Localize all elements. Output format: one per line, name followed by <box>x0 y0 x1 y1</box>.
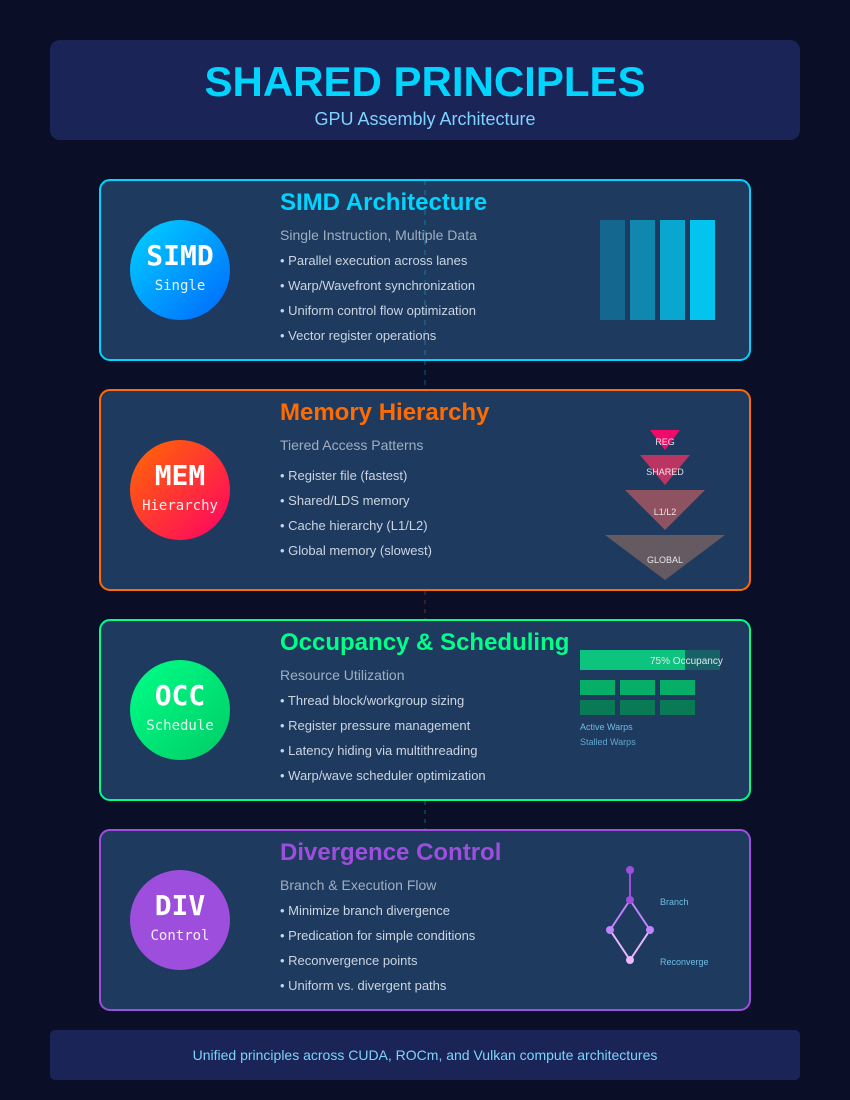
badge: DIV <box>130 870 230 970</box>
chart: occupancy: Active Warps <box>580 722 633 732</box>
memory text block: • Shared/LDS memory <box>280 493 410 508</box>
SIMD text block <box>280 227 477 343</box>
divergence text block <box>280 877 476 993</box>
badge: MEM: MEM <box>155 459 205 492</box>
memory text block: • Global memory (slowest) <box>280 543 432 558</box>
badge: SIMD <box>130 220 230 320</box>
subtitle: GPU Assembly Architecture <box>314 109 536 129</box>
badge: OCC: Schedule <box>146 718 214 734</box>
memory text block: • Register file (fastest) <box>280 468 407 483</box>
divergence text block: • Reconvergence points <box>280 953 418 968</box>
SIMD text block: • Vector register operations <box>280 328 437 343</box>
panel: SIMD architecture <box>100 180 750 390</box>
memory text block <box>280 437 432 558</box>
diagram: branch flow: Reconverge <box>660 957 709 967</box>
memory text block: Tiered Access Patterns <box>280 437 423 453</box>
chart: occupancy <box>580 650 723 747</box>
footer panel <box>50 1030 800 1080</box>
badge: DIV: DIV <box>155 889 205 922</box>
occupancy text block: • Thread block/workgroup sizing <box>280 693 464 708</box>
header panel <box>50 40 800 140</box>
occupancy heading: Occupancy & Scheduling <box>280 629 569 656</box>
diagram: branch flow: Branch <box>660 897 689 907</box>
badge: DIV: Control <box>150 928 210 944</box>
panel: memory hierarchy <box>100 390 750 620</box>
badge: SIMD: Single <box>155 278 205 294</box>
badge: MEM: Hierarchy <box>142 498 218 514</box>
memory text block: • Cache hierarchy (L1/L2) <box>280 518 428 533</box>
chart: memory pyramid: SHARED <box>646 467 684 477</box>
occupancy text block <box>280 667 486 783</box>
title: SHARED PRINCIPLES <box>204 58 646 105</box>
chart: memory pyramid: REG <box>655 437 675 447</box>
panel: divergence control <box>100 830 750 1010</box>
panel: occupancy and scheduling <box>100 620 750 830</box>
occupancy text block: • Latency hiding via multithreading <box>280 743 478 758</box>
badge: SIMD: SIMD <box>146 239 214 272</box>
chart: occupancy: Stalled Warps <box>580 737 636 747</box>
chart: memory pyramid <box>605 430 725 580</box>
badge: MEM <box>130 440 230 540</box>
SIMD text block: • Uniform control flow optimization <box>280 303 476 318</box>
occupancy text block: • Warp/wave scheduler optimization <box>280 768 486 783</box>
occupancy text block: Resource Utilization <box>280 667 404 683</box>
divergence text block: Branch & Execution Flow <box>280 877 437 893</box>
divergence heading: Divergence Control <box>280 839 501 866</box>
chart: occupancy: 75% Occupancy <box>650 656 723 667</box>
chart: SIMD lanes <box>600 220 715 320</box>
chart: memory pyramid: GLOBAL <box>647 555 683 565</box>
divergence text block: • Uniform vs. divergent paths <box>280 978 447 993</box>
divergence text block: • Minimize branch divergence <box>280 903 450 918</box>
memory heading: Memory Hierarchy <box>280 399 490 426</box>
SIMD heading: SIMD Architecture <box>280 189 487 216</box>
footer panel: Unified principles across CUDA, ROCm, and Vulkan compute architectures <box>193 1047 657 1063</box>
chart: memory pyramid: L1/L2 <box>654 507 676 517</box>
divergence text block: • Predication for simple conditions <box>280 928 476 943</box>
badge: OCC: OCC <box>155 679 205 712</box>
SIMD text block: • Parallel execution across lanes <box>280 253 468 268</box>
SIMD text block: • Warp/Wavefront synchronization <box>280 278 475 293</box>
SIMD text block: Single Instruction, Multiple Data <box>280 227 477 243</box>
diagram: branch flow <box>606 866 709 967</box>
occupancy text block: • Register pressure management <box>280 718 471 733</box>
badge: OCC <box>130 660 230 760</box>
